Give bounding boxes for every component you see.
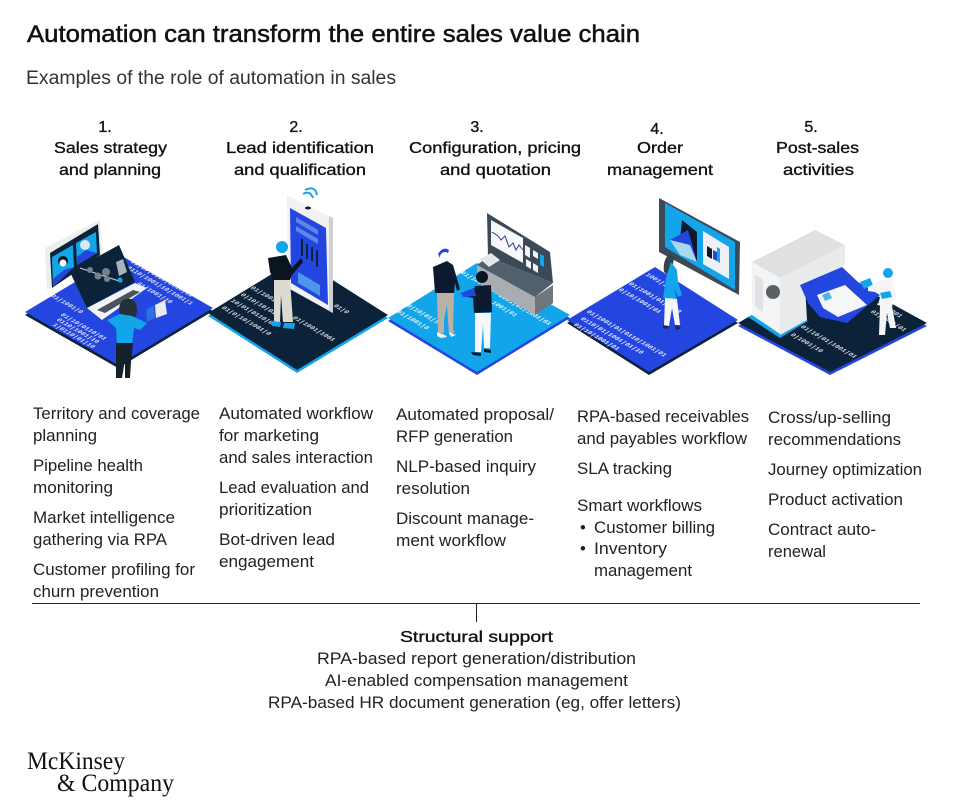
illustration: order management platform with wall screen and person: 1001|10 [643,273,673,290]
list: step 4 examples: • [580,519,586,537]
illustration: sales strategy platform with laptop and person: 01|1001|0 [48,294,85,315]
illustration: configuration platform with kiosk and two people: 01|1001|0 [394,310,431,331]
heading: step 3: 3. [470,119,484,136]
illustration: post-sales platform with machine and robot: 0|1001|10 [788,333,825,354]
heading: step 5: 5. [804,119,818,136]
illustration: sales strategy platform with laptop and person: 1|0110|01|10 [50,323,97,349]
structural support block: RPA-based report generation/distribution [317,650,636,668]
list: step 3 examples: Automated proposal/ [396,406,554,424]
list: step 5 examples [768,409,922,561]
logo: McKinsey & Company: McKinsey [27,748,125,775]
list: step 4 examples [577,408,749,580]
heading: step 2 [226,119,374,179]
heading: step 1: Sales strategy [54,140,167,157]
logo: McKinsey & Company: & Company [57,770,174,797]
heading: step 2: Lead identification [226,140,374,157]
illustration: sales strategy platform with laptop and person: 0110|1001|10|1001|1 [124,266,195,306]
list: step 1 examples [33,405,200,601]
list: step 3 examples [396,406,554,550]
list: step 1 examples: planning [33,427,97,445]
illustration: lead identification platform with phone and person: 01|0|10|1001|0 [219,306,273,336]
list: step 1 examples: Customer profiling for [33,561,196,579]
list: step 4 examples: • [580,540,586,558]
illustration: lead identification platform with phone and person: 01|1001|1001 [290,316,337,342]
list: step 2 examples: Automated workflow [219,405,373,423]
illustration: configuration platform with kiosk and two people [388,213,570,375]
heading: step 1: and planning [59,162,161,179]
list: step 2 examples [219,405,373,571]
illustration: order management platform with wall screen and person [567,198,740,375]
illustration: sales strategy platform with laptop and person: 01|1001|10 [134,282,174,305]
illustration: order management platform with wall screen and person: 01|1001|01|0110|1001|01 [584,310,668,358]
title: Automation can transform the entire sales value chain [27,21,640,48]
illustration: sales strategy platform with laptop and person: 0110|1001|10 [54,318,101,344]
list: step 1 examples: Market intelligence [33,509,175,527]
list: step 3 examples: resolution [396,480,470,498]
list: step 5 examples: renewal [768,543,826,561]
list: step 3 examples: RFP generation [396,428,513,446]
list: step 4 examples: RPA-based receivables [577,408,749,426]
illustration: configuration platform with kiosk and two people: 01|1001|1001 [458,271,505,297]
list: step 2 examples: prioritization [219,501,312,519]
list: step 1 examples: Territory and coverage [33,405,200,423]
heading: step 2: and qualification [234,162,366,179]
heading: step 3: and quotation [440,162,551,179]
list: step 1 examples: churn prevention [33,583,159,601]
heading: step 4 [607,121,714,179]
list: step 5 examples: Journey optimization [768,461,922,479]
illustration: post-sales platform with machine and robot: 01|1001 [874,302,904,319]
illustration: lead identification platform with phone and person: 0|10|10|01 [238,293,278,316]
illustration: order management platform with wall screen and person: 01|10|1001|01 [571,323,621,351]
heading: step 4: management [607,162,714,179]
illustration: configuration platform with kiosk and two people: 1001|01|1001|01 [496,294,553,326]
list: step 5 examples: Contract auto- [768,521,876,539]
heading: step 5: activities [783,162,854,179]
heading: step 1: 1. [98,119,112,136]
illustration: post-sales platform with machine and robot: 01|1001|01 [868,310,908,333]
illustration: order management platform with wall screen and person: 0110|01|1001|01|10 [578,317,645,355]
illustration: post-sales platform with machine and robot: 01|10|01|1001|01 [798,325,859,359]
illustration: sales strategy platform with laptop and person [25,220,213,378]
structural support block [268,629,681,712]
heading: step 3: Configuration, pricing [409,140,581,157]
illustration: sales strategy platform with laptop and person: 01|10|0110|0110|01 [128,260,195,298]
illustration: configuration platform with kiosk and two people: 0|10|01|10 [404,304,444,327]
list: step 5 examples: recommendations [768,431,901,449]
illustration: lead identification platform with phone and person [208,188,388,373]
list: step 2 examples: Lead evaluation and [219,479,369,497]
list: step 5 examples: Cross/up-selling [768,409,891,427]
illustration: post-sales platform with machine and robot [738,230,927,375]
list: step 1 examples: monitoring [33,479,113,497]
heading: step 5: Post-sales [776,140,859,157]
list: step 3 examples: ment workflow [396,532,506,550]
illustration: lead identification platform with phone and person: 01|0 [331,304,351,315]
heading: step 4: Order [637,140,684,157]
illustration: order management platform with wall screen and person: 01|1001|01|0110 [626,282,683,314]
heading: step 2: 2. [289,119,303,136]
list: step 4 examples: SLA tracking [577,460,672,478]
illustration: configuration platform with kiosk and two people: 1001|01 [489,301,519,318]
list: step 1 examples: gathering via RPA [33,531,167,549]
list: step 4 examples: and payables workflow [577,430,747,448]
illustration: order management platform with wall screen and person: 0|10|1001|01 [616,288,663,314]
list: step 4 examples: Customer billing [594,519,715,537]
logo: McKinsey & Company [27,748,174,797]
structural support block: RPA-based HR document generation (eg, offer letters) [268,694,681,712]
list: step 2 examples: for marketing [219,427,319,445]
list: step 2 examples: engagement [219,553,314,571]
structural support block: Structural support [400,629,554,646]
list: step 2 examples: and sales interaction [219,449,373,467]
list: step 4 examples: management [594,562,692,580]
heading: step 5 [776,119,859,179]
list: step 1 examples: Pipeline health [33,457,143,475]
heading: step 1 [54,119,167,179]
list: step 3 examples: NLP-based inquiry [396,458,537,476]
list: step 5 examples: Product activation [768,491,903,509]
structural support block: AI-enabled compensation management [325,672,628,690]
list: step 4 examples: Smart workflows [577,497,702,515]
list: step 4 examples: Inventory [594,540,668,558]
subtitle: Examples of the role of automation in sales [26,68,396,89]
illustration: sales strategy platform with laptop and person: 01|10|0110|01 [58,313,108,341]
list: step 3 examples: Discount manage- [396,510,534,528]
illustration: lead identification platform with phone and person: 01|1001 [248,286,278,303]
heading: step 4: 4. [650,121,664,138]
list: step 2 examples: Bot-driven lead [219,531,335,549]
heading: step 3 [409,119,581,179]
illustration: lead identification platform with phone and person: 10|01|0110|01 [228,299,278,327]
